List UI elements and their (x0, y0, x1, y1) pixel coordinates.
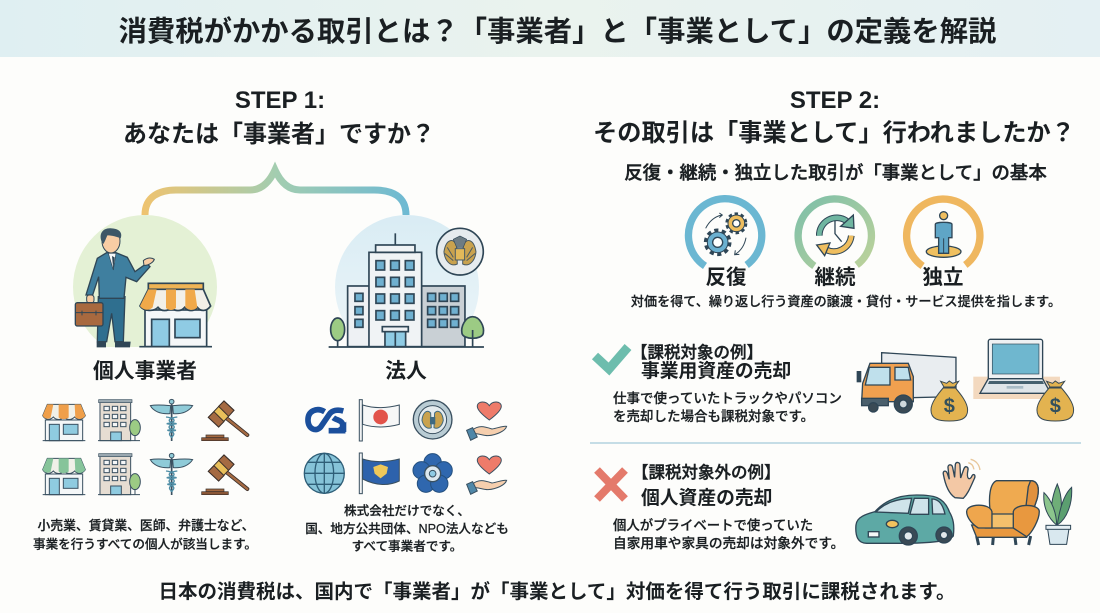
text: taxable description: 仕事で使っていたトラックやパソコン (613, 391, 842, 406)
text: corporation description: 株式会社だけでなく、 (344, 504, 470, 518)
illustration: sole proprietor (73, 215, 217, 359)
heading: non-taxable example: 【課税対象外の例】 (632, 462, 780, 482)
label: repeat: 反復 (706, 266, 747, 289)
icon: laptop with money bag (973, 339, 1074, 421)
text: corporation description (305, 504, 509, 554)
text: non-taxable description (613, 517, 844, 551)
icon: japan flag (359, 400, 399, 441)
text: sole proprietor description: 事業を行うすべての個人が該当します。 (33, 536, 257, 552)
heading: taxable example (631, 342, 791, 381)
icon: car (856, 495, 954, 545)
heading: taxable example: 事業用資産の売却 (641, 360, 791, 381)
heading: non-taxable example (632, 462, 780, 508)
icon grid: sole proprietor types (43, 399, 247, 495)
icon: repeat ring (688, 199, 762, 266)
divider (590, 442, 1081, 444)
heading: step 2 (593, 87, 1075, 147)
store row 1 (43, 404, 85, 441)
icon: truck with money bag (857, 353, 968, 421)
text: taxable description: を売却した場合も課税対象です。 (613, 408, 814, 424)
text: non-taxable description: 個人がプライベートで使っていた (613, 517, 813, 533)
text: non-taxable description: 自家用車や家具の売却は対象外です。 (613, 535, 844, 551)
heading: taxable example: 【課税対象の例】 (631, 342, 763, 362)
heading: step 2: STEP 2: (790, 87, 880, 114)
icon: flower gear (413, 454, 452, 492)
icon: emblem (437, 228, 483, 275)
icon: cross mark (597, 470, 625, 499)
icon: continue ring (798, 199, 871, 266)
icon: office building (329, 233, 484, 347)
text: corporation description: 国、地方公共団体、NPO法人なども (305, 521, 509, 536)
label: continue: 継続 (814, 266, 856, 289)
icon: shop (139, 283, 212, 347)
icon: company logo (308, 410, 345, 431)
text: corporation description: すべて事業者です。 (352, 538, 462, 554)
icon: check mark (595, 347, 628, 369)
text: sole proprietor description (33, 518, 257, 552)
icon: waving hand (943, 459, 980, 498)
icon: armchair (967, 481, 1039, 545)
title band: 消費税がかかる取引とは？「事業者」と「事業として」の定義を解説 (119, 15, 996, 48)
icon: globe (304, 453, 344, 493)
heading: step 1: STEP 1: (235, 87, 325, 114)
icon: potted plant (1044, 484, 1072, 544)
icon grid: corporation types (304, 400, 507, 494)
text: taxable description (613, 391, 842, 424)
icon: businessman (75, 228, 154, 347)
illustration: corporation (329, 215, 484, 359)
bracket (145, 170, 406, 215)
text: sole proprietor description: 小売業、賃貸業、医師、弁護士など、 (38, 518, 254, 533)
store row 2 (43, 458, 85, 495)
heading: step 2: その取引は「事業として」行われましたか？ (593, 120, 1075, 147)
icon: independent ring (907, 199, 980, 266)
heading: step 1: あなたは「事業者」ですか？ (123, 121, 435, 148)
text: definition: 対価を得て、繰り返し行う資産の譲渡・貸付・サービス提供を指します。 (631, 293, 1061, 309)
icon: blue flag (359, 453, 399, 494)
label: sole proprietor: 個人事業者 (93, 359, 197, 383)
label: independent: 独立 (922, 266, 964, 289)
title band (0, 0, 1100, 57)
subheading: 反復・継続・独立した取引が「事業として」の基本 (624, 162, 1047, 183)
heading: non-taxable example: 個人資産の売却 (641, 487, 772, 508)
icon: seal (413, 400, 452, 439)
label: corporation: 法人 (385, 360, 427, 383)
footer statement: 日本の消費税は、国内で「事業者」が「事業として」対価を得て行う取引に課税されます。 (159, 580, 955, 603)
heading: step 1 (123, 87, 435, 148)
